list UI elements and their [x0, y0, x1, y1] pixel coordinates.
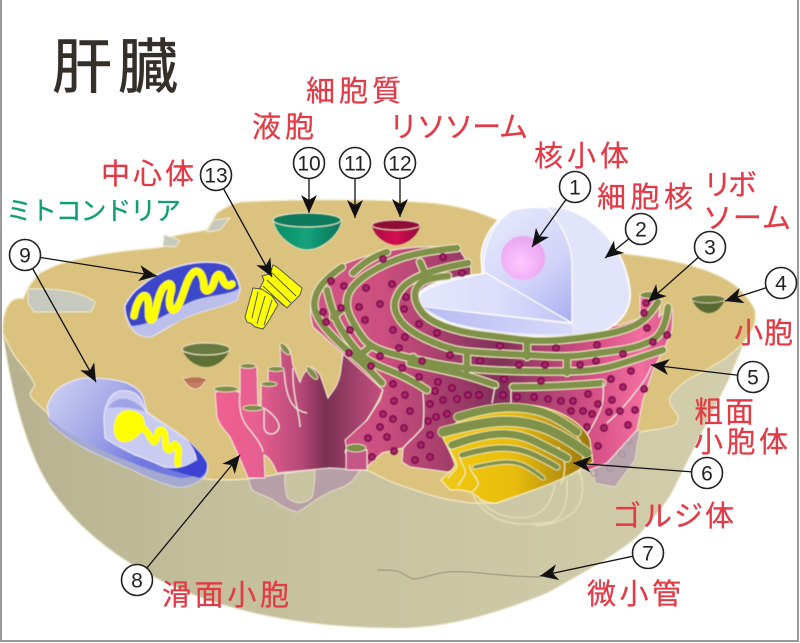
label: mitochondria: ミトコンドリア	[6, 196, 181, 226]
arrow 4	[725, 283, 781, 301]
ER body	[310, 246, 673, 472]
golgi ghost under bowl	[473, 472, 583, 526]
label: cytoplasm: 細胞質	[306, 75, 401, 108]
label: microtubule: 微小管	[587, 578, 681, 611]
number badge 11	[340, 148, 370, 178]
number badge 4	[766, 268, 796, 298]
label: golgi: ゴルジ体	[612, 500, 734, 533]
number badge 8	[122, 564, 152, 596]
arrow 9 to lower mitochondrion	[25, 255, 96, 382]
small ER tube	[346, 444, 367, 470]
label: centrosome: 中心体	[101, 158, 194, 191]
arrow 9 to upper mitochondrion	[25, 255, 157, 276]
number badge 7: 7	[642, 542, 654, 566]
number badge 12: 12	[388, 152, 412, 176]
label: rough ER line 2: 小胞体	[694, 426, 788, 459]
ribosomes	[320, 254, 670, 463]
vacuole	[273, 213, 342, 250]
number badge 5	[738, 362, 768, 392]
number badge 11: 11	[344, 152, 366, 176]
faded ER under the bowl	[248, 430, 640, 512]
number badge 2	[626, 214, 656, 244]
arrow 3	[648, 247, 710, 302]
arrow 10	[308, 163, 310, 213]
number badge 6: 6	[701, 462, 713, 486]
mitochondrion upper	[125, 262, 240, 337]
fold lines	[403, 365, 652, 448]
cisternae outline	[314, 248, 668, 390]
arrow 12	[399, 163, 401, 217]
arrow 13	[216, 175, 272, 277]
label: ribosome line 2: ソーム	[703, 203, 791, 235]
small orange vesicle	[183, 378, 206, 389]
label: rough ER line 1: 粗面	[694, 396, 754, 429]
arrow 6	[573, 463, 707, 473]
number badge 8: 8	[131, 570, 143, 592]
number badge 6	[692, 458, 722, 488]
arrow 7	[540, 553, 648, 576]
label: ribosome line 1: リボ	[703, 170, 757, 202]
number badge 2: 2	[635, 218, 647, 242]
number badge 10: 10	[297, 152, 321, 176]
number badge 7	[632, 538, 664, 568]
lysosome	[372, 220, 420, 245]
cisternae green	[314, 248, 668, 390]
label: nucleolus: 核小体	[534, 140, 629, 173]
label: vesicle: 小胞	[734, 317, 793, 350]
number badge 3: 3	[704, 236, 716, 260]
number badge 9	[10, 240, 40, 270]
number badge 3	[694, 232, 726, 262]
smooth endoplasmic reticulum	[214, 340, 383, 478]
label: smooth ER: 滑面小胞	[162, 579, 289, 612]
rough endoplasmic reticulum	[310, 206, 673, 472]
number badge 12	[384, 148, 416, 178]
vacuoles in cell surface	[28, 218, 230, 312]
label: vacuole: 液胞	[252, 111, 314, 144]
golgi apparatus	[440, 405, 593, 503]
nucleus	[419, 206, 630, 337]
olive vesicle	[182, 343, 230, 367]
label: nucleus: 細胞核	[597, 181, 693, 214]
number badge 1	[560, 172, 590, 202]
number badge 1: 1	[569, 176, 581, 200]
cell body: cut bowl	[3, 333, 743, 628]
mitochondrion lower	[47, 378, 208, 487]
arrow 1	[532, 187, 575, 247]
number badge 9: 9	[19, 244, 31, 268]
arrow 2	[605, 229, 641, 258]
label: lysosome: リソソーム	[389, 112, 528, 144]
cytoplasm surface	[3, 200, 755, 503]
centriole	[245, 265, 302, 329]
arrow 11	[354, 163, 356, 218]
title: 肝臓	[52, 34, 178, 101]
vesicle right	[691, 295, 725, 313]
number badge 13: 13	[204, 164, 228, 188]
microtubule	[377, 570, 540, 579]
number badge 5: 5	[747, 366, 759, 390]
number badge 4: 4	[775, 272, 787, 296]
number badge 10	[294, 148, 324, 178]
arrow 8	[137, 455, 240, 580]
arrow 5	[651, 365, 753, 377]
number badge 13	[200, 160, 232, 190]
